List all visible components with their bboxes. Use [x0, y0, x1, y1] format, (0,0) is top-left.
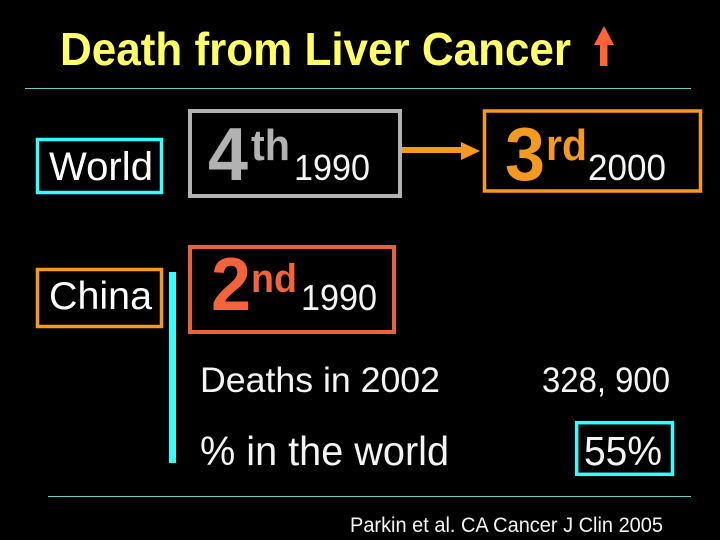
world 2000 rank box	[484, 111, 700, 196]
china label box	[38, 270, 162, 326]
china 1990 rank box	[190, 242, 394, 332]
china 1990 rank box: 2	[211, 242, 251, 326]
world label box: World	[49, 145, 153, 189]
percent row label: % in the world	[200, 428, 449, 474]
title: Death from Liver Cancer	[60, 23, 571, 75]
citation: Parkin et al. CA Cancer J Clin 2005	[350, 514, 663, 537]
china 1990 rank box: nd	[251, 257, 297, 301]
deaths row	[200, 361, 670, 400]
world 1990 rank box	[190, 111, 400, 196]
world label box	[38, 140, 162, 192]
china 1990 rank box: 1990	[301, 277, 377, 318]
deaths row: 328, 900	[542, 361, 670, 400]
world 2000 rank box: 3	[505, 112, 545, 196]
world 1990 rank box: 1990	[294, 147, 370, 188]
world 2000 rank box: 2000	[588, 147, 666, 188]
arrow: world rank change	[402, 142, 480, 160]
china label box: China	[49, 275, 152, 318]
icon: up arrow	[594, 26, 614, 66]
deaths row: Deaths in 2002	[200, 361, 440, 400]
world 1990 rank box: 4	[208, 112, 248, 196]
china bracket bar	[169, 272, 176, 463]
world 2000 rank box: rd	[546, 121, 587, 170]
callout: 55 percent: 55%	[584, 428, 662, 474]
world 1990 rank box: th	[251, 121, 290, 170]
